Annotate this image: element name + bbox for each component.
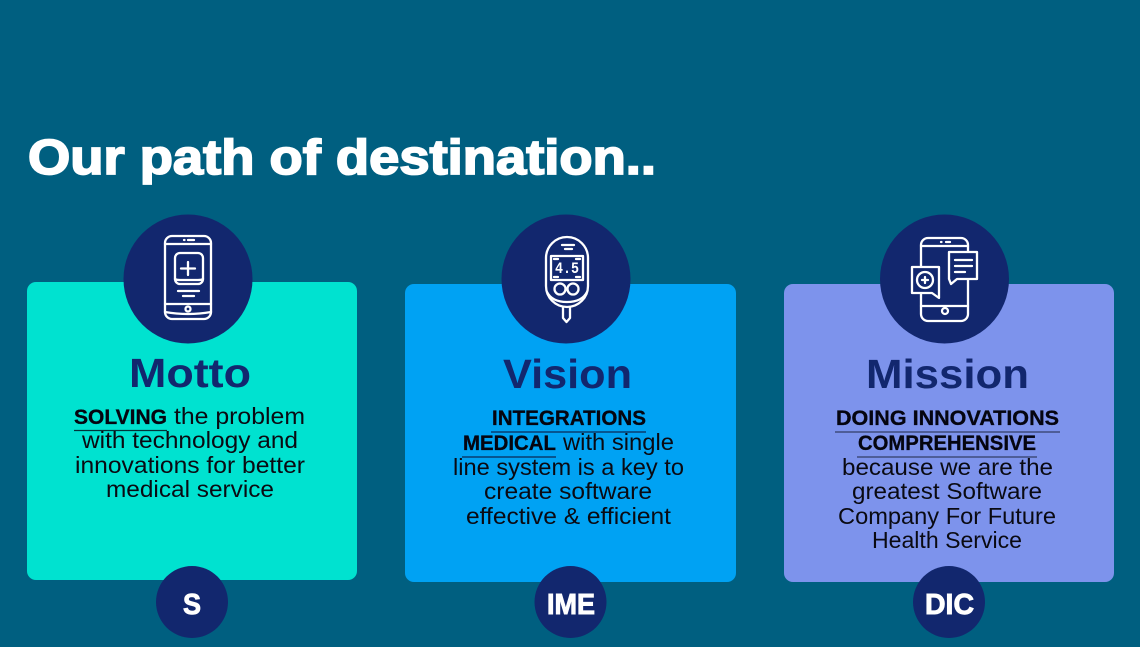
badge: DIC [913, 566, 985, 638]
text: motto description: the problem [174, 403, 305, 429]
title: Our path of destination.. [28, 131, 656, 185]
card background [405, 284, 736, 582]
text: vision description: create software [484, 478, 652, 504]
panel: vision [405, 214, 736, 638]
badge: IME: IME [547, 589, 595, 621]
text: motto description: innovations for better [75, 452, 305, 478]
card background [784, 284, 1114, 582]
heading: Vision: Vision [503, 351, 632, 397]
panel: motto [27, 214, 357, 638]
icon: glucose meter: 4.5 [555, 260, 579, 278]
panel: mission [784, 214, 1114, 638]
icon: phone with medical cross [124, 214, 252, 344]
text: vision description: with single [562, 429, 674, 455]
text: vision description: line system is a key to [453, 454, 684, 480]
text: mission description: DOING INNOVATIONS [836, 407, 1059, 430]
text: vision description: effective & efficient [466, 503, 672, 529]
badge: DIC: DIC [925, 589, 974, 621]
text: mission description: greatest Software [852, 478, 1042, 504]
text: mission description [835, 407, 1060, 553]
text: vision description: INTEGRATIONS [492, 407, 646, 430]
icon: glucose meter [502, 214, 630, 344]
heading: Mission: Mission [866, 351, 1029, 397]
heading: Motto: Motto [129, 350, 251, 396]
badge: S [156, 566, 228, 638]
text: motto description: SOLVING [74, 406, 167, 429]
text: motto description [74, 403, 305, 502]
text: vision description: MEDICAL [463, 432, 556, 455]
badge: IME [534, 566, 606, 638]
text: vision description [453, 407, 684, 529]
card background [27, 282, 357, 580]
text: motto description: with technology and [81, 427, 298, 453]
badge: S: S [183, 589, 201, 621]
icon: phone with chat bubbles [880, 214, 1009, 344]
text: mission description: COMPREHENSIVE [858, 432, 1036, 455]
text: mission description: Company For Future [838, 503, 1056, 529]
text: mission description: because we are the [842, 454, 1053, 480]
text: motto description: medical service [106, 476, 274, 502]
text: mission description: Health Service [872, 527, 1022, 553]
